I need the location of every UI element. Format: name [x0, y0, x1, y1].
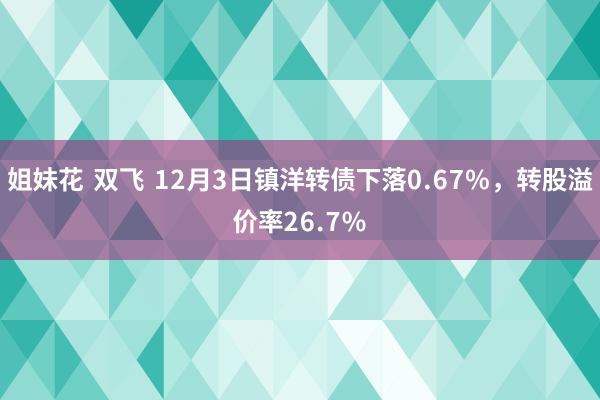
title: 价率26.7% — [232, 202, 368, 239]
title — [7, 160, 593, 239]
title: 姐妹花 双飞 12月3日镇洋转债下落0.67%，转股溢 — [7, 160, 593, 197]
panel: translucent purple title band — [0, 140, 600, 260]
